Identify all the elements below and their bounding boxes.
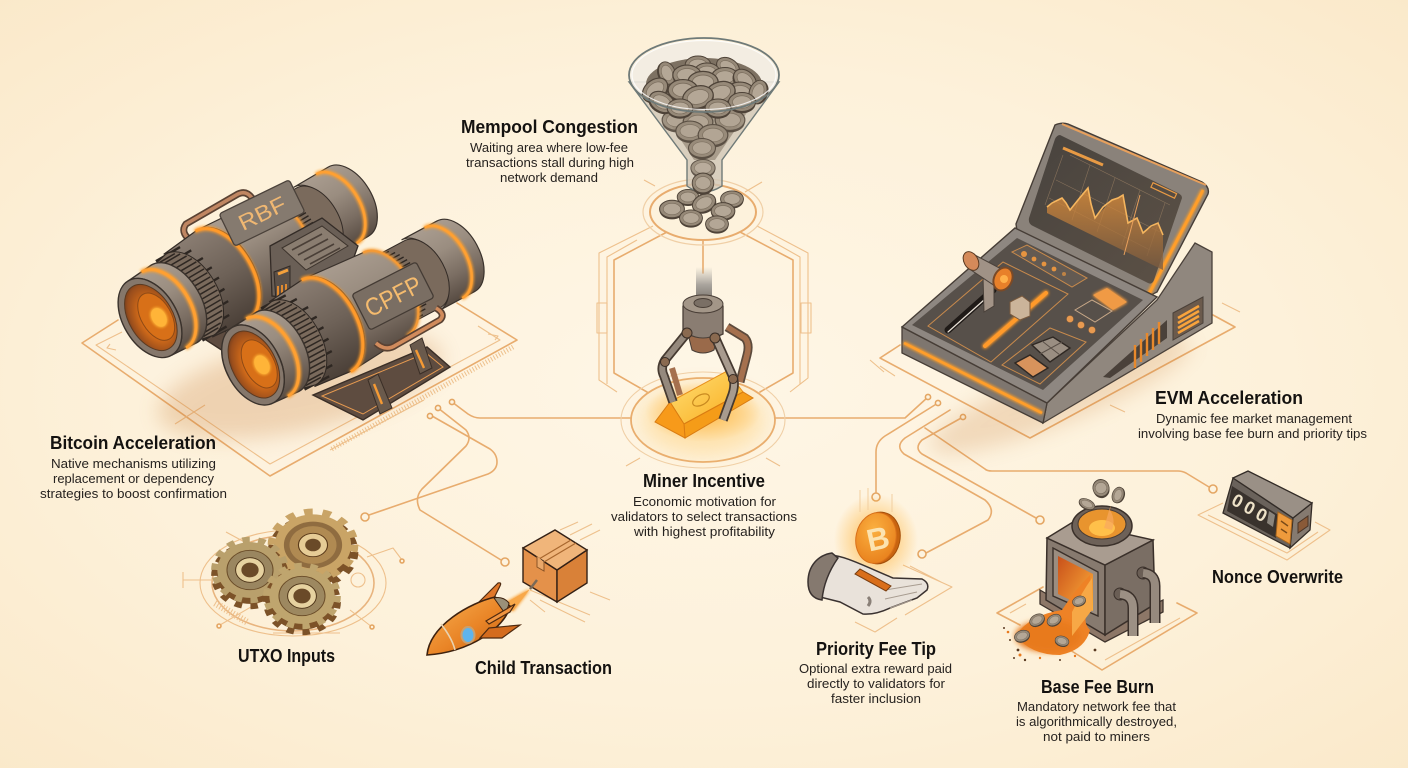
description: bitcoin: Native mechanisms utilizing [51,456,216,471]
description: miner: Economic motivation for [633,494,777,509]
heading: Miner Incentive: Miner Incentive [643,471,765,491]
description: priority: Optional extra reward paid [799,661,952,676]
back arm [727,327,748,382]
slider frame [928,262,1068,362]
description: base fee: Mandatory network fee that [1017,699,1176,714]
icon: hand receiving coin [808,488,928,614]
description: priority [799,661,952,706]
console back housing [1043,243,1212,423]
isometric blueprint plate [870,303,1240,438]
icon: rocket [427,580,537,655]
screen bezel [1016,123,1208,300]
left arm [662,333,687,402]
blueprint plate [1198,503,1330,560]
panel: priority fee tip [799,488,952,706]
icon: spilled coins [660,189,743,234]
RBF handle [184,193,252,240]
description: mempool [466,140,634,185]
knobs [1066,315,1096,334]
button block [1002,328,1086,384]
panel: EVM acceleration [870,123,1368,473]
console front skirt [902,327,1047,423]
stand base [203,330,450,420]
heading: Bitcoin Acceleration: Bitcoin Acceleration [50,433,216,453]
description: miner: with highest profitability [633,524,776,539]
icon: trading control console [902,123,1212,423]
funnel base disc [643,179,763,245]
heading: Mempool Congestion: Mempool Congestion [461,117,638,137]
panel: UTXO inputs [183,513,404,666]
pipes [1137,567,1149,579]
icon: mechanical counter: 0 [1252,504,1271,526]
panel: mempool congestion [461,38,811,392]
chart screen [1029,135,1182,284]
icon: mechanical counter [1223,471,1312,548]
description: base fee: not paid to miners [1043,729,1151,744]
description: bitcoin [40,456,227,501]
RBF nameplate [219,180,305,246]
heading: Base Fee Burn: Base Fee Burn [1041,677,1154,697]
panel: nonce overwrite [1198,471,1343,587]
target rings [621,372,785,468]
RBF barrel [100,145,395,377]
spilled ember powder [1016,575,1092,655]
description: bitcoin: replacement or dependency [53,471,214,486]
heading: UTXO Inputs: UTXO Inputs [238,646,335,666]
blueprint plate [855,565,952,632]
hexagon frame around the claw [597,226,811,392]
description: mempool: network demand [500,170,598,185]
panel: miner incentive [611,267,798,539]
panel: base fee burn [997,478,1197,744]
panel: bitcoin acceleration [40,145,517,501]
icon: gold bar [645,371,761,442]
description: priority: faster inclusion [831,691,921,706]
heading: Priority Fee Tip: Priority Fee Tip [816,639,936,659]
icon: glass funnel full of coins [629,38,779,195]
CPFP handle [376,308,442,348]
description: EVM: involving base fee burn and priority tips [1138,426,1368,441]
front arm [715,337,734,420]
description: mempool: transactions stall during high [466,155,634,170]
top indicator strip [1012,245,1087,287]
description: priority: directly to validators for [807,676,946,691]
description: EVM: Dynamic fee market management [1156,411,1352,426]
head [683,299,723,339]
blueprint plate [997,587,1197,670]
icon: mechanical counter: 0 [1240,497,1259,519]
icon: three interlocking gears [215,513,353,632]
shadow under binoculars [149,310,451,460]
slider knob [1010,296,1030,320]
description: base fee: is algorithmically destroyed, [1016,714,1177,729]
icon: furnace burning coins [1003,478,1163,661]
heading: EVM Acceleration: EVM Acceleration [1155,388,1303,408]
circuit traces connecting the nodes [361,394,1217,566]
icon: mechanical claw [660,267,748,420]
blueprint circle [183,530,404,636]
icon: mechanical counter: 0 [1228,490,1247,512]
description: EVM [1138,411,1368,441]
isometric blueprint plate [82,296,517,476]
description: miner: validators to select transactions [611,509,798,524]
icon: cardboard box [523,530,587,602]
lever [983,277,994,312]
CPFP barrel [205,199,501,424]
speed lines [530,522,610,622]
description: mempool: Waiting area where low-fee [470,140,628,155]
lever slot [948,290,993,330]
description: bitcoin: strategies to boost confirmation [40,486,227,501]
digital readout [1093,288,1127,310]
icon: binoculars with RBF and CPFP barrels [100,145,501,424]
heading: Child Transaction: Child Transaction [475,658,612,678]
heading: Nonce Overwrite: Nonce Overwrite [1212,567,1343,587]
door [1053,548,1098,616]
glowing slider bar [985,293,1046,346]
description: base fee [1016,699,1177,744]
center bridge [270,218,358,298]
icon: hand receiving coin: B [863,519,893,558]
desk top [902,228,1157,403]
RBF nameplate: RBF [234,191,290,236]
top ring [1072,506,1132,546]
flying coins [1091,478,1111,500]
panel: child transaction [427,522,612,678]
CPFP nameplate: CPFP [360,271,427,323]
description: miner [611,494,798,539]
